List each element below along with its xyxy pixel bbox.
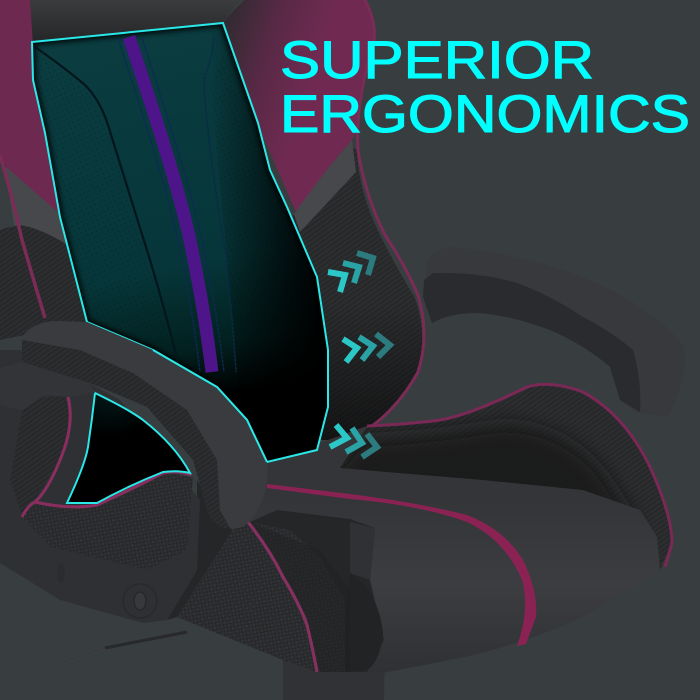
lumbar right shade: [205, 23, 328, 462]
lower lumbar window: [67, 393, 190, 503]
side seam right: [204, 38, 236, 372]
seat outer shell: [230, 384, 672, 673]
stitch lines: [118, 38, 224, 372]
left piping around opening: [22, 397, 191, 517]
arrows: upper: [328, 253, 373, 292]
arrows: middle: [343, 334, 390, 362]
lumbar pad highlight: [32, 23, 328, 462]
title: ERGONOMICS: [280, 85, 690, 144]
grey side band left: [5, 166, 66, 244]
left arm frame: [0, 350, 200, 623]
arm edge highlight: [153, 350, 267, 462]
wing right shade: [250, 522, 350, 672]
lumbar edge shadow: [33, 24, 298, 379]
side seam left: [35, 47, 178, 362]
arm pad: [22, 321, 268, 528]
perforation texture: [36, 40, 320, 400]
arm carbon band: [22, 340, 230, 528]
lower hip carbon panel: [22, 473, 193, 570]
title: SUPERIOR: [280, 31, 594, 90]
right armrest: [423, 247, 685, 417]
right arm pad: [423, 247, 685, 417]
maroon upper backrest right: [222, 0, 374, 212]
maroon upper backrest left: [0, 0, 62, 218]
seat front stripe: [267, 484, 536, 646]
right arm inner band: [423, 273, 640, 412]
seat panel shadow: [340, 418, 633, 507]
grey side band right: [294, 140, 356, 232]
title: [280, 31, 690, 144]
seat carbon panel: [340, 384, 672, 570]
arm lower bracket: [0, 362, 95, 410]
arrows: lower: [330, 425, 377, 457]
chair backrest shell: [0, 140, 423, 440]
lumbar pad fill: [32, 23, 328, 462]
chair base cylinder: [283, 650, 385, 700]
wing piping: [248, 522, 317, 672]
seat side wing carbon: [177, 522, 345, 672]
seat: [230, 384, 672, 673]
headrest top dark panel: [28, 0, 240, 44]
lumbar outline: [32, 23, 328, 462]
maroon piping: backrest left edge: [0, 155, 45, 318]
dark gap between frame and wing: [167, 480, 233, 620]
left armrest: [0, 321, 268, 528]
tilt lever: [63, 632, 187, 662]
purple stripe: [129, 37, 212, 372]
seat piping: [367, 384, 672, 567]
rear carbon panel through arm: [10, 395, 70, 515]
side control recess: [233, 510, 384, 672]
maroon piping: backrest right edge: [358, 0, 424, 426]
